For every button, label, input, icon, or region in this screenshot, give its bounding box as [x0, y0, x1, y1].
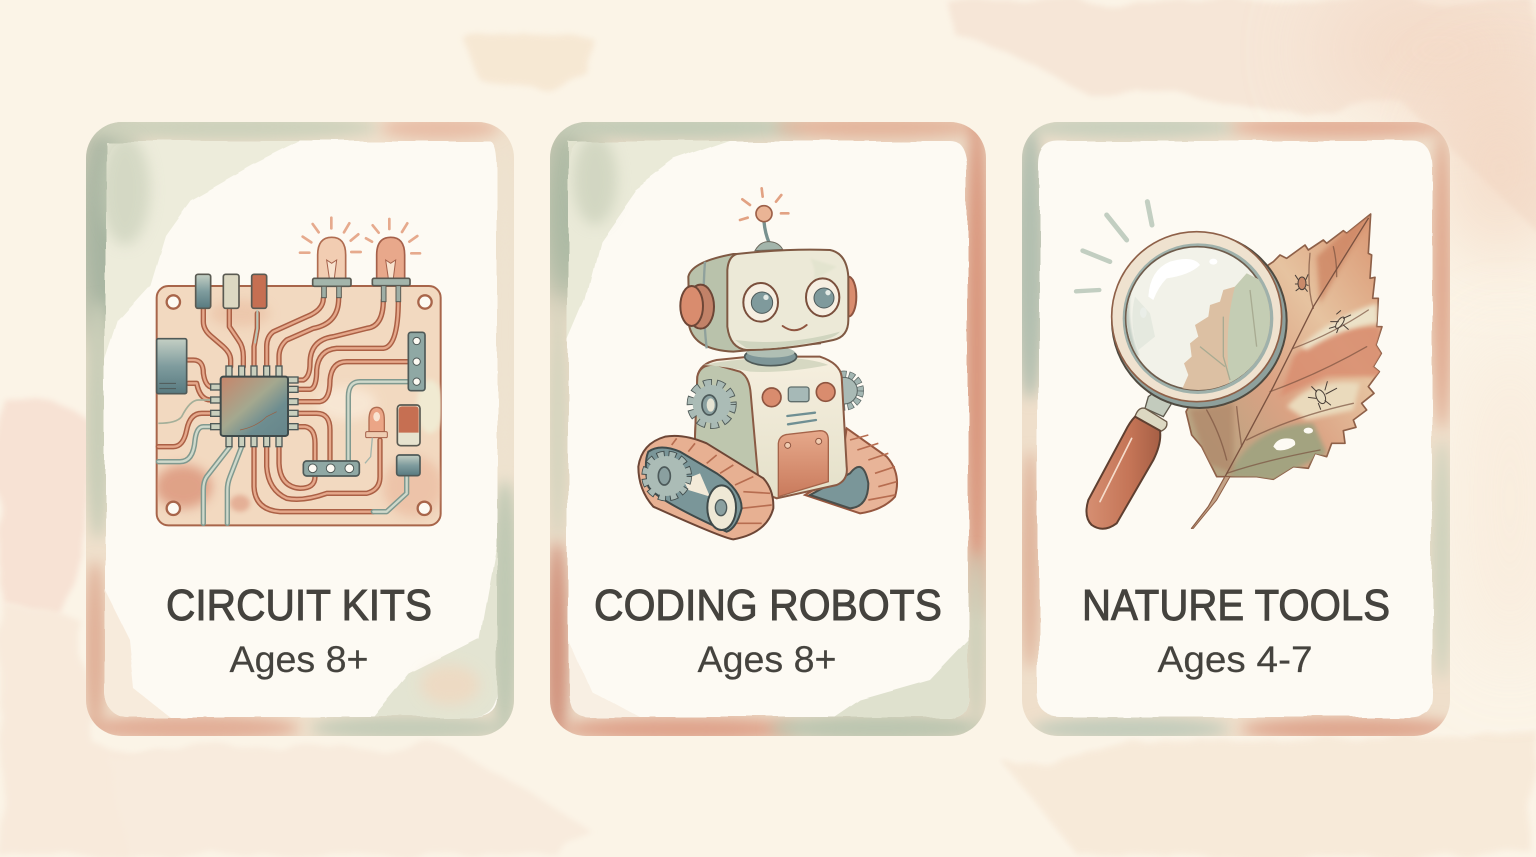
card 3 paper	[1038, 141, 1432, 717]
small LED	[365, 407, 387, 463]
title: nature tools: NATURE TOOLS	[1082, 581, 1390, 630]
copper traces	[158, 298, 408, 512]
leaf	[1182, 214, 1383, 528]
icon: circuit board	[155, 218, 443, 525]
leaf holes	[1273, 438, 1295, 450]
magnifier lens ring and glass	[1112, 232, 1287, 408]
age label: circuit kits: Ages 8+	[230, 639, 368, 680]
card 2 paper	[568, 141, 968, 717]
sage traces	[158, 382, 408, 523]
title: circuit kits: CIRCUIT KITS	[166, 581, 432, 630]
card 1 painted border	[71, 110, 521, 741]
microchip	[221, 377, 288, 436]
left connector block	[157, 339, 187, 394]
mounting holes	[167, 295, 432, 515]
right ear	[840, 277, 856, 317]
card 2 paper washes	[568, 135, 968, 717]
capacitor	[397, 405, 420, 446]
antenna	[740, 188, 788, 251]
title: coding robots: CODING ROBOTS	[594, 581, 942, 630]
panel: circuit kits card	[71, 110, 521, 741]
icon: robot	[638, 188, 897, 539]
board	[157, 286, 441, 525]
robot smile	[783, 325, 807, 330]
left track	[638, 436, 773, 539]
panel: coding robots card	[550, 122, 986, 736]
card 1 paper washes	[100, 135, 497, 717]
resistor block	[397, 455, 420, 476]
left ear	[680, 285, 714, 329]
card 3 painted border	[1014, 115, 1460, 741]
sparkle marks	[1076, 202, 1152, 291]
neck	[745, 347, 797, 366]
panel: nature tools card	[1014, 115, 1460, 741]
top components	[196, 274, 267, 308]
bottom pin header	[303, 461, 359, 476]
robot body	[695, 357, 847, 498]
magnifier handle	[1086, 392, 1172, 529]
left gear	[692, 384, 732, 424]
age label: coding robots: Ages 8+	[698, 639, 836, 680]
right track	[805, 428, 897, 513]
LED bulbs	[300, 218, 420, 302]
chip pins	[211, 366, 298, 447]
right pin header	[408, 332, 425, 391]
bugs on leaf	[1295, 275, 1351, 409]
card 1 paper	[105, 141, 497, 717]
age label: nature tools: Ages 4-7	[1158, 639, 1312, 680]
robot eyes	[743, 278, 839, 322]
card 2 painted border	[550, 122, 986, 736]
robot head	[688, 250, 848, 352]
icon: magnifying glass and leaf	[1076, 202, 1383, 529]
track gear	[646, 455, 687, 497]
right gear	[828, 375, 860, 407]
leaf veins	[1192, 218, 1368, 528]
